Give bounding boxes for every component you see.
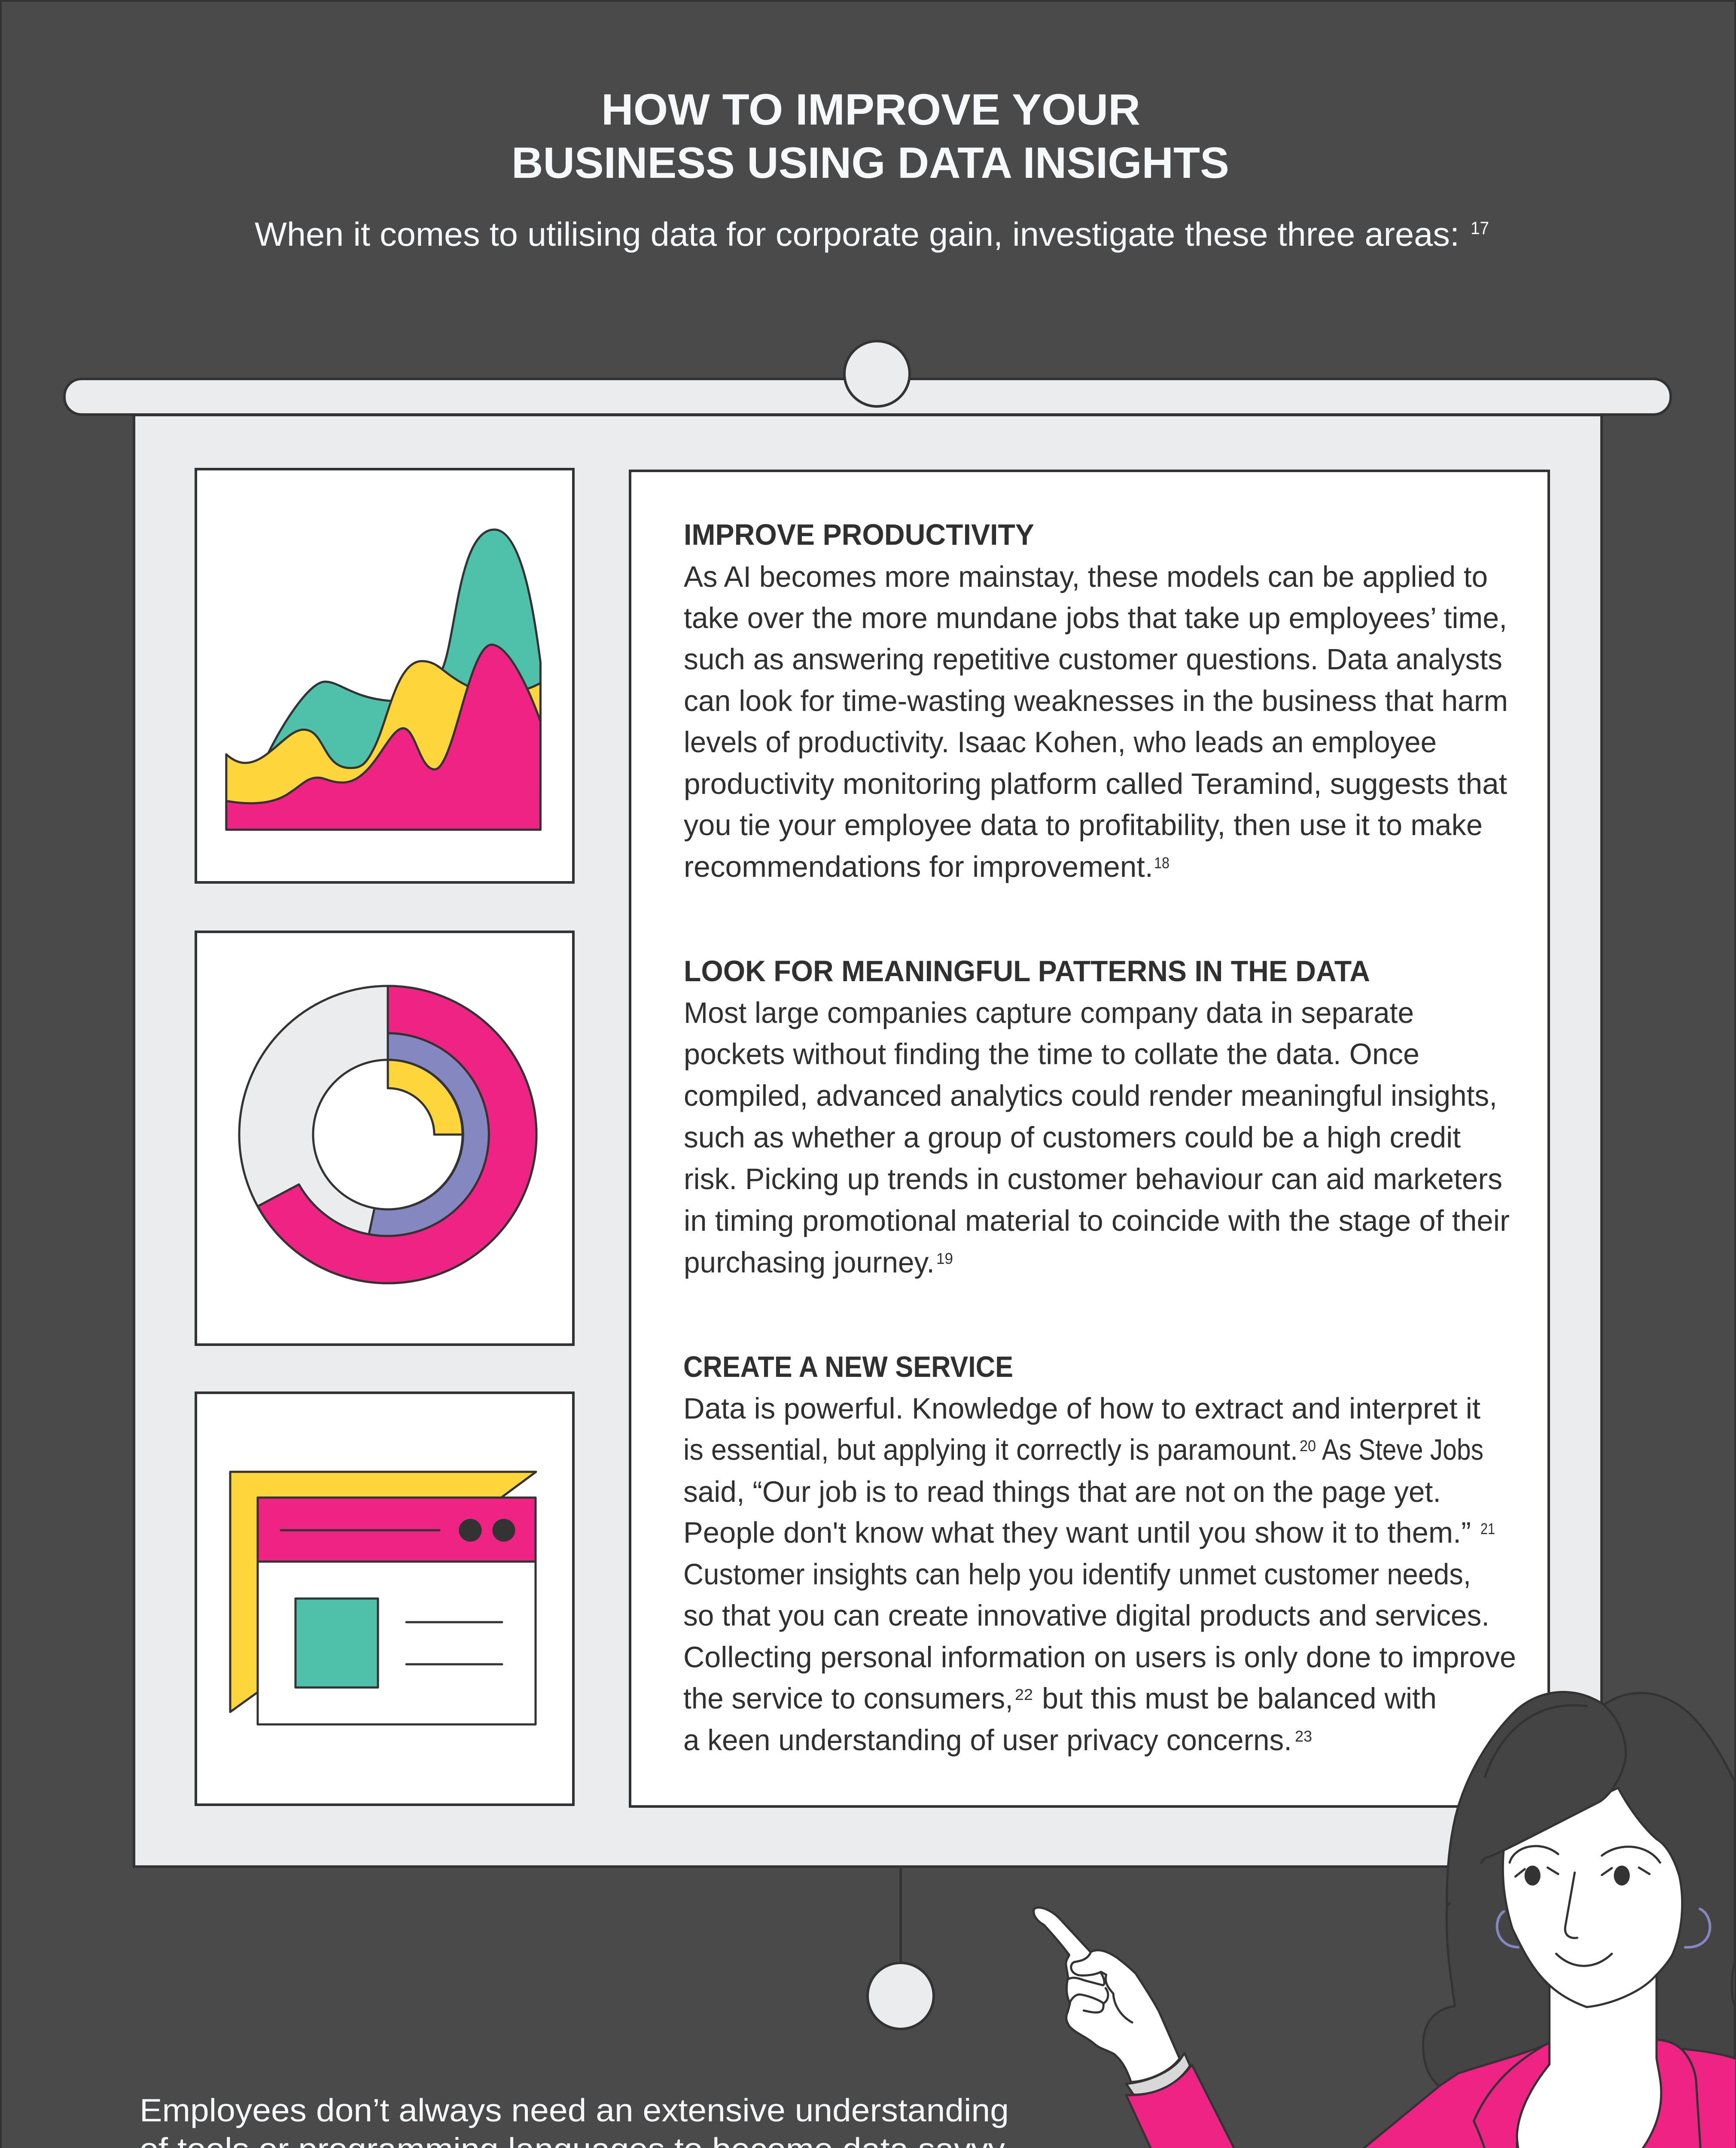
section: create a new service: 21 (1480, 1520, 1495, 1538)
arm and pointing hand (1034, 1907, 1417, 2148)
section: look for meaningful patterns: Most large companies capture company data in separate (684, 996, 1414, 1029)
hair back (1423, 1692, 1735, 2130)
section: create a new service: People don't know what they want until you show it to them.” (683, 1516, 1471, 1549)
section: improve productivity: productivity monitoring platform called Teramind, suggests that (684, 767, 1507, 800)
section: create a new service: Data is powerful. Knowledge of how to extract and interpret it (683, 1392, 1480, 1425)
title (512, 85, 1229, 187)
section: look for meaningful patterns: LOOK FOR MEANINGFUL PATTERNS IN THE DATA (684, 955, 1370, 988)
shirt, neck and lapels (1474, 1944, 1700, 2148)
subtitle: When it comes to utilising data for corporate gain, investigate these three areas: (255, 215, 1459, 253)
section: look for meaningful patterns: such as whether a group of customers could be a high credit (684, 1121, 1461, 1154)
section: create a new service: so that you can create innovative digital products and services. (683, 1599, 1489, 1632)
section: create a new service: said, “Our job is to read things that are not on the page yet. (683, 1475, 1441, 1508)
section: improve productivity (684, 518, 1508, 883)
section: create a new service: but this must be balanced with (1042, 1682, 1437, 1715)
panel: donut chart (196, 932, 573, 1345)
area chart (226, 530, 540, 830)
section: create a new service: Customer insights can help you identify unmet customer needs, (683, 1558, 1471, 1591)
section: create a new service (683, 1350, 1516, 1757)
section: create a new service: a keen understanding of user privacy concerns. (683, 1724, 1292, 1757)
section: look for meaningful patterns: in timing promotional material to coincide with the stage of their (684, 1204, 1510, 1237)
section: create a new service: 23 (1295, 1727, 1312, 1745)
subtitle: 17 (1471, 218, 1489, 238)
pull cord and handle (868, 1867, 934, 2029)
section: create a new service: As Steve Jobs (1322, 1433, 1483, 1466)
section: look for meaningful patterns: compiled, advanced analytics could render meaningful insights, (684, 1079, 1497, 1112)
section: improve productivity: can look for time-wasting weaknesses in the business that harm (684, 684, 1508, 717)
panel: text content (630, 471, 1549, 1806)
title: BUSINESS USING DATA INSIGHTS (512, 138, 1229, 187)
section: look for meaningful patterns: risk. Picking up trends in customer behaviour can aid marketers (684, 1162, 1502, 1196)
donut chart (239, 986, 536, 1283)
panel: browser window icon (196, 1393, 573, 1805)
section: look for meaningful patterns: 19 (936, 1250, 953, 1267)
section: create a new service: Collecting personal information on users is only done to improve (683, 1641, 1516, 1674)
section: look for meaningful patterns: purchasing journey. (684, 1246, 935, 1279)
icon: browser window (230, 1472, 536, 1724)
panel: area chart (196, 469, 573, 882)
earrings (1497, 1909, 1710, 1947)
presenter illustration (1034, 1692, 1736, 2148)
projector screen (134, 415, 1602, 1867)
hair fringe (1447, 1692, 1626, 1907)
section: look for meaningful patterns: pockets without finding the time to collate the data. Once (684, 1037, 1419, 1071)
section: improve productivity: you tie your employee data to profitability, then use it to make (684, 809, 1483, 842)
section: improve productivity: IMPROVE PRODUCTIVITY (684, 518, 1034, 551)
section: create a new service: 22 (1015, 1686, 1033, 1703)
section: create a new service: CREATE A NEW SERVICE (683, 1350, 1013, 1383)
jacket body (1288, 2041, 1736, 2148)
closing statement text: Employees don’t always need an extensive understanding (140, 2092, 1009, 2128)
closing statement text (140, 2092, 1033, 2148)
section: create a new service: the service to consumers, (683, 1682, 1013, 1715)
section: improve productivity: recommendations for improvement. (684, 850, 1153, 883)
face (1447, 1692, 1682, 2007)
title: HOW TO IMPROVE YOUR (601, 85, 1140, 134)
screen roller rail (64, 341, 1671, 415)
section: improve productivity: 18 (1154, 854, 1170, 872)
section: improve productivity: take over the more mundane jobs that take up employees’ time, (684, 601, 1507, 635)
section: look for meaningful patterns (684, 955, 1510, 1279)
section: improve productivity: such as answering repetitive customer questions. Data analysts (684, 643, 1502, 676)
section: create a new service: 20 (1300, 1437, 1316, 1455)
section: improve productivity: levels of productivity. Isaac Kohen, who leads an employee (684, 726, 1437, 759)
section: create a new service: is essential, but applying it correctly is paramount. (683, 1433, 1298, 1466)
section: improve productivity: As AI becomes more mainstay, these models can be applied to (684, 560, 1488, 593)
